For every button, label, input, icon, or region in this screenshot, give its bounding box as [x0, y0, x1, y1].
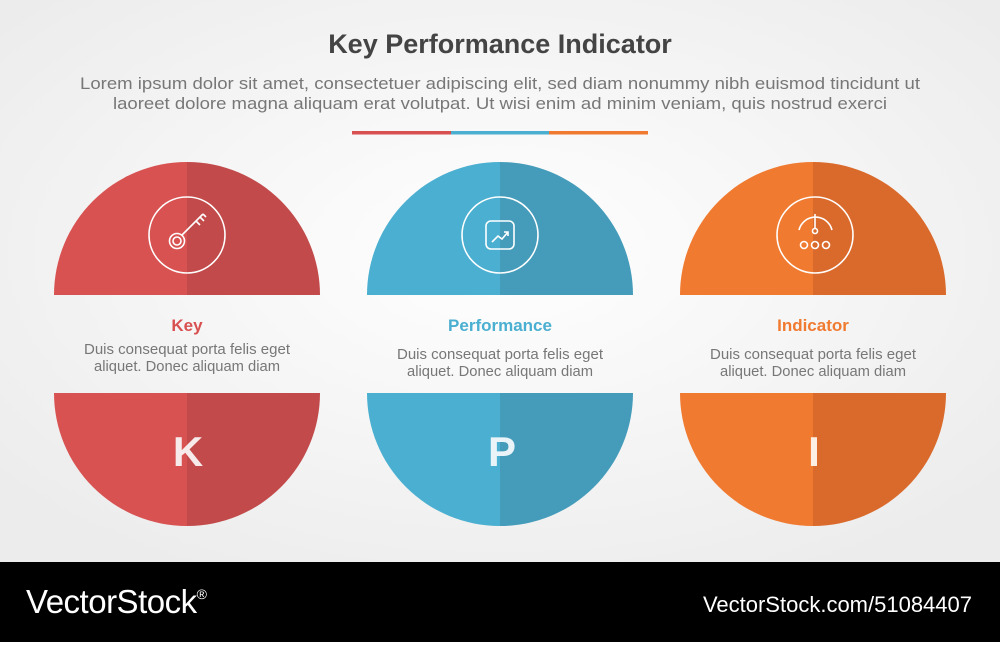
text: key	[84, 342, 290, 375]
text: key: aliquet. Donec aliquam diam	[94, 359, 280, 375]
subtitle text	[80, 74, 920, 113]
panel: indicator	[680, 162, 946, 526]
heading: performance: Performance	[448, 316, 552, 335]
footer bar: ®	[197, 586, 208, 602]
subtitle text: Lorem ipsum dolor sit amet, consectetuer adipiscing elit, sed diam nonummy nibh euismod tincidunt ut	[80, 74, 920, 93]
heading: indicator: Indicator	[777, 316, 849, 335]
footer bar: VectorStock	[26, 583, 197, 620]
text: indicator	[710, 347, 916, 380]
text: performance: Duis consequat porta felis eget	[397, 347, 603, 363]
text: performance: aliquet. Donec aliquam diam	[407, 364, 593, 380]
color divider	[352, 131, 648, 134]
letter P: P	[488, 428, 516, 475]
text: indicator: aliquet. Donec aliquam diam	[720, 364, 906, 380]
heading: key: Key	[171, 316, 203, 335]
panel: key	[54, 162, 320, 526]
letter I: I	[808, 428, 820, 475]
text: performance	[397, 347, 603, 380]
text: key: Duis consequat porta felis eget	[84, 342, 290, 358]
subtitle text: laoreet dolore magna aliquam erat volutpat. Ut wisi enim ad minim veniam, quis nostrud exerci	[113, 94, 887, 113]
icon: key	[149, 197, 225, 273]
letter K: K	[173, 428, 203, 475]
icon: chart	[462, 197, 538, 273]
text: indicator: Duis consequat porta felis eget	[710, 347, 916, 363]
footer bar	[0, 562, 1000, 642]
footer bar: VectorStock.com/51084407	[703, 592, 972, 617]
panel: performance	[367, 162, 633, 526]
icon: gauge	[777, 197, 853, 273]
title: Key Performance Indicator	[328, 29, 672, 59]
